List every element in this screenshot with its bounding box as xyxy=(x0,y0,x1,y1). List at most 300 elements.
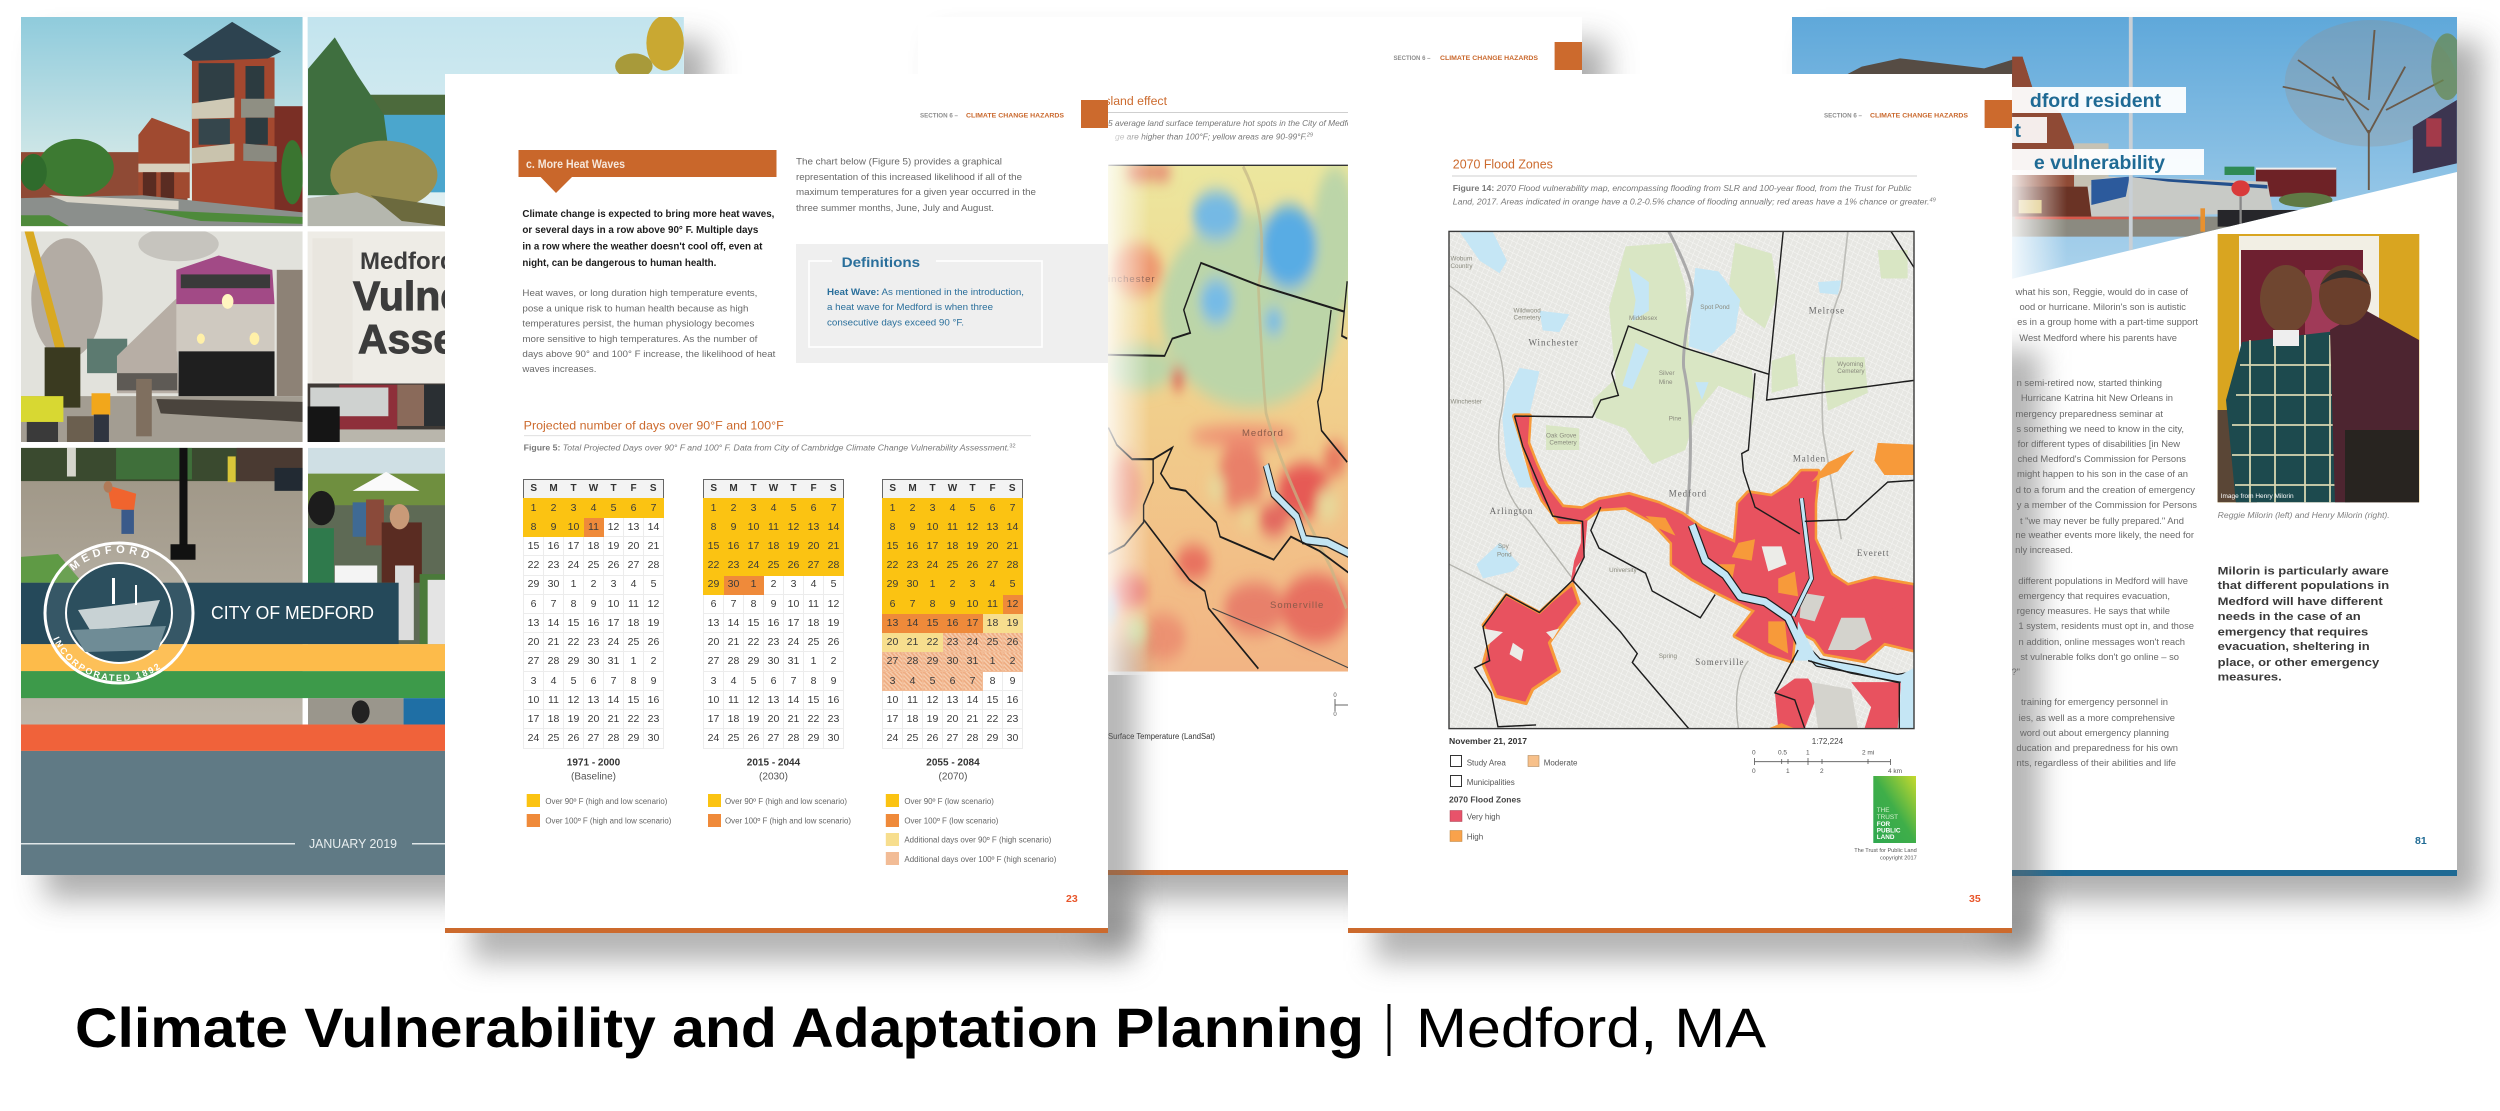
calendar: 2055-2084: 22 xyxy=(987,713,998,725)
calendar: 1971-2000 baseline: 13 xyxy=(588,694,599,706)
calendar: 1971-2000 baseline: 15 xyxy=(628,694,639,706)
calendar captions: 2055 - 2084 xyxy=(926,758,980,768)
calendar: 1971-2000 baseline: 31 xyxy=(608,655,619,667)
place names: Wyoming xyxy=(1837,361,1864,368)
body paragraph: more sensitive to high temperatures. As the number of xyxy=(522,333,758,344)
calendar: 2015-2044: 21 xyxy=(788,713,799,725)
text column: Milorin story: y a member of the Commission for Persons xyxy=(2017,499,2197,510)
photo: Medford storefront behind cover title xyxy=(308,231,446,442)
calendar legends: Over 90º F (low scenario) xyxy=(904,797,994,806)
calendar: 2055-2084: 14 xyxy=(907,617,918,629)
calendar: 2015-2044: 23 xyxy=(768,636,779,648)
calendar: 1971-2000 baseline: 19 xyxy=(568,713,579,725)
calendar: 2055-2084: 18 xyxy=(947,540,958,552)
page 35 cast shadow, right xyxy=(1992,350,2040,940)
calendar: 2055-2084: 25 xyxy=(907,732,918,744)
calendar: 2055-2084: 14 xyxy=(967,694,978,706)
calendar: 2015-2044: F xyxy=(810,483,817,494)
calendar: 2015-2044: 1 xyxy=(751,578,756,590)
calendar: 1971-2000 baseline: 23 xyxy=(548,559,559,571)
text column: Milorin story: ched Medford's Commission for Persons xyxy=(2017,453,2186,464)
calendar legends: Over 100º F (high and low scenario) xyxy=(545,816,672,826)
calendar: 1971-2000 baseline: 9 xyxy=(591,598,596,610)
cover photo collage xyxy=(20,16,691,876)
calendar: 2055-2084: 13 xyxy=(887,617,898,629)
calendar: 1971-2000 baseline: 12 xyxy=(608,521,619,533)
calendar: 2015-2044: W xyxy=(769,483,778,494)
running header: SECTION 6 – xyxy=(1394,55,1431,62)
cover title: Medford Vulnerability Assessment: Vulnerability xyxy=(353,273,598,319)
calendar: 1971-2000 baseline: 22 xyxy=(628,713,639,725)
map scale: 0 xyxy=(1333,693,1337,699)
bold intro paragraph: night, can be dangerous to human health. xyxy=(522,258,717,269)
calendar: 2015-2044: 5 xyxy=(791,502,796,514)
footer bar xyxy=(1348,928,2012,933)
calendar: 1971-2000 baseline: 24 xyxy=(608,636,619,648)
place names xyxy=(1451,256,1890,668)
photo caption: Reggie Milorin (left) and Henry Milorin (right). xyxy=(2218,511,2390,520)
heading: Medford resident fragments: t xyxy=(2014,120,2022,142)
calendar: 2015-2044: 25 xyxy=(808,636,819,648)
icon: city seal: INCORPORATED 1892 xyxy=(53,636,160,681)
calendar: 2015-2044: 11 xyxy=(768,521,779,533)
calendar: 1971-2000 baseline: 30 xyxy=(588,655,599,667)
calendar: 2055-2084: 25 xyxy=(947,559,958,571)
text column: Milorin story: ?" xyxy=(2011,666,2020,677)
text column: Milorin story: for different types of disabilities [in New xyxy=(2018,438,2180,449)
map legend: Municipalities xyxy=(1467,778,1515,787)
text column: Milorin story: nts, regardless of their abilities and life xyxy=(2017,757,2176,768)
footer bar xyxy=(445,928,1108,933)
callout: Milorin pull quote xyxy=(2218,566,2389,684)
calendar: 1971-2000 baseline: 8 xyxy=(571,598,576,610)
text column: Milorin story: might happen to his son in the case of an xyxy=(2017,468,2188,479)
calendar: 2015-2044: 14 xyxy=(828,521,839,533)
calendar: 2015-2044: 18 xyxy=(808,617,819,629)
calendar: 2055-2084: S xyxy=(889,483,896,494)
text column: Milorin story: nly increased. xyxy=(2015,544,2073,555)
calendar: 1971-2000 baseline: 27 xyxy=(588,732,599,744)
text column: Milorin story: what his son, Reggie, would do in case of xyxy=(2014,286,2188,297)
place names: Pond xyxy=(1497,551,1512,558)
calendar: 2015-2044: 31 xyxy=(788,655,799,667)
map scale: 0 xyxy=(1333,712,1337,718)
text column: Milorin story: Hurricane Katrina hit New Orleans in xyxy=(2021,392,2173,403)
map scale xyxy=(1333,693,1350,718)
calendar: 2055-2084 xyxy=(882,479,1023,749)
calendar: 2055-2084: 5 xyxy=(1010,578,1015,590)
calendar: 2015-2044: 6 xyxy=(811,502,816,514)
calendar: 2055-2084: 17 xyxy=(887,713,898,725)
calendar: 2055-2084: 16 xyxy=(947,617,958,629)
calendar: 2055-2084: 22 xyxy=(927,636,938,648)
calendar: 2015-2044: 27 xyxy=(768,732,779,744)
calendar: 2015-2044: 10 xyxy=(788,598,799,610)
calendar: 2015-2044: 11 xyxy=(808,598,819,610)
calendar: 2055-2084: 22 xyxy=(887,559,898,571)
calendar: 2055-2084: 24 xyxy=(887,732,898,744)
calendar: 2015-2044: S xyxy=(710,483,717,494)
calendar: 2055-2084: 29 xyxy=(987,732,998,744)
calendar: 2015-2044: 25 xyxy=(728,732,739,744)
flood zone: Mystic corridor xyxy=(1515,416,1914,661)
calendar: 2015-2044: 27 xyxy=(708,655,719,667)
calendar: 2055-2084: 4 xyxy=(910,675,915,687)
photo: commuter train and construction crew xyxy=(21,227,303,442)
calendar: 2055-2084: 2 xyxy=(910,502,915,514)
calendar: 2055-2084: 23 xyxy=(907,559,918,571)
calendar: 2015-2044: 23 xyxy=(728,559,739,571)
calendar captions: (Baseline) xyxy=(571,772,616,782)
calendar: 2055-2084: 21 xyxy=(1007,540,1018,552)
scale bar: 0 xyxy=(1752,768,1756,775)
calendar: 2055-2084: 8 xyxy=(990,675,995,687)
calendar: 2015-2044: 1 xyxy=(711,502,716,514)
calendar: 2015-2044: 4 xyxy=(811,578,816,590)
calendar: 2015-2044: 24 xyxy=(708,732,719,744)
calendar: 1971-2000 baseline: 21 xyxy=(648,540,659,552)
scale bar: 2 xyxy=(1820,768,1824,775)
calendar: 1971-2000 baseline: W xyxy=(589,483,598,494)
page 23 cast shadow, right xyxy=(1088,640,1136,940)
calendar: 2055-2084: 24 xyxy=(927,559,938,571)
calendar: 1971-2000 baseline: 11 xyxy=(548,694,559,706)
place names: Arlington xyxy=(1490,507,1533,517)
calendar: 2015-2044: 9 xyxy=(771,598,776,610)
calendar: 2055-2084: 31 xyxy=(967,655,978,667)
calendar: 1971-2000 baseline: 6 xyxy=(531,598,536,610)
calendar: 1971-2000 baseline: 21 xyxy=(548,636,559,648)
calendar: 2015-2044: 29 xyxy=(708,578,719,590)
calendar: 2055-2084: 26 xyxy=(1007,636,1018,648)
definitions box: Definitions xyxy=(842,255,920,270)
calendar: 1971-2000 baseline: 23 xyxy=(648,713,659,725)
place names: Country xyxy=(1451,263,1473,270)
text column: Milorin story: ood or hurricane. Milorin's son is autistic xyxy=(2020,301,2186,312)
calendar: 2055-2084: 16 xyxy=(907,540,918,552)
calendar: 1971-2000 baseline: 25 xyxy=(628,636,639,648)
place names: Woburn xyxy=(1451,256,1473,263)
calendar captions: 1971 - 2000 xyxy=(567,758,621,768)
calendar: 2055-2084: 1 xyxy=(930,578,935,590)
calendar: 2055-2084: 11 xyxy=(947,521,958,533)
calendar: 2055-2084: 6 xyxy=(950,675,955,687)
calendar: 1971-2000 baseline: 29 xyxy=(568,655,579,667)
scale bar: 4 km xyxy=(1888,768,1902,775)
calendar: 1971-2000 baseline: 14 xyxy=(548,617,559,629)
calendar: 2015-2044: 26 xyxy=(788,559,799,571)
calendar: 2015-2044: 30 xyxy=(768,655,779,667)
calendar: 2015-2044: 1 xyxy=(811,655,816,667)
calendar: 1971-2000 baseline: 18 xyxy=(628,617,639,629)
place names: Spot Pond xyxy=(1700,304,1730,311)
water xyxy=(1460,232,1841,579)
calendar: 2015-2044: 4 xyxy=(731,675,736,687)
text column: Milorin story: training for emergency personnel in xyxy=(2021,696,2168,707)
calendar: 1971-2000 baseline: 26 xyxy=(568,732,579,744)
calendar captions: (2070) xyxy=(939,772,967,782)
calendar: 2015-2044: 25 xyxy=(768,559,779,571)
calendar: 2055-2084: 13 xyxy=(987,521,998,533)
calendar: 1971-2000 baseline: 15 xyxy=(528,540,539,552)
bold intro paragraph: or several days in a row above 90° F. Multiple days xyxy=(522,225,759,236)
calendar: 2015-2044: 11 xyxy=(728,694,739,706)
calendar: 2055-2084: 28 xyxy=(1007,559,1018,571)
calendar: 2055-2084: 29 xyxy=(887,578,898,590)
text column: Milorin story: ne weather events more likely, the need for xyxy=(2015,529,2194,540)
calendar: 2055-2084: 23 xyxy=(1007,713,1018,725)
calendar: 2055-2084: F xyxy=(989,483,996,494)
calendar: 1971-2000 baseline: 16 xyxy=(648,694,659,706)
text column: Milorin story: ies, as well as a more comprehensive xyxy=(2019,712,2175,723)
place names: Cemetery xyxy=(1514,314,1541,322)
running header xyxy=(1824,100,2012,128)
calendar: 1971-2000 baseline: 4 xyxy=(551,675,556,687)
calendar: 2015-2044: 30 xyxy=(828,732,839,744)
place names: Somerville xyxy=(1695,658,1745,668)
figure caption: 32 xyxy=(1009,444,1016,450)
calendar: 2055-2084: 9 xyxy=(910,521,915,533)
heading: 2070 Flood Zones: 2070 Flood Zones xyxy=(1453,158,1553,172)
running header: CLIMATE CHANGE HAZARDS xyxy=(1440,55,1539,62)
body paragraph: Heat waves, or long duration high temperature events, xyxy=(522,287,757,298)
calendar: 2055-2084: 24 xyxy=(967,636,978,648)
definitions box xyxy=(796,244,1108,363)
place names: Medford xyxy=(1669,488,1707,500)
calendar: 1971-2000 baseline: M xyxy=(549,483,558,494)
calendar: 2055-2084: 18 xyxy=(987,617,998,629)
logo: The Trust for Public Land: PUBLIC xyxy=(1877,828,1901,834)
calendar: 2055-2084: 6 xyxy=(990,502,995,514)
calendar: 2055-2084: 20 xyxy=(947,713,958,725)
body paragraph: temperatures persist, the human physiology becomes xyxy=(522,318,755,328)
calendar: 1971-2000 baseline: 30 xyxy=(648,732,659,744)
figure caption xyxy=(1093,118,1359,142)
calendar: 2015-2044: 12 xyxy=(788,521,799,533)
calendar: 1971-2000 baseline: 16 xyxy=(548,540,559,552)
calendar: 2055-2084: 7 xyxy=(970,675,975,687)
panel: report cover xyxy=(21,17,684,875)
calendar: 2015-2044: 26 xyxy=(748,732,759,744)
calendar: 2055-2084: 18 xyxy=(907,713,918,725)
Mystic river xyxy=(1692,525,1918,679)
calendar: 2015-2044: 15 xyxy=(808,694,819,706)
cover colour bands xyxy=(21,583,691,876)
calendar: 2015-2044: 28 xyxy=(828,559,839,571)
calendar: 1971-2000 baseline: 19 xyxy=(608,540,619,552)
map legend: High xyxy=(1467,832,1483,842)
panel: page 23 heat waves xyxy=(445,74,1108,933)
calendar: 1971-2000 baseline: 24 xyxy=(528,732,539,744)
calendar: 2015-2044: 24 xyxy=(748,559,759,571)
heading: Medford resident fragments xyxy=(1990,87,2204,175)
callout: Milorin pull quote: place, or other emergency xyxy=(2218,657,2380,669)
place names: Malden xyxy=(1793,455,1826,465)
calendar: 2015-2044: T xyxy=(750,483,757,494)
place names: Mine xyxy=(1659,379,1673,386)
calendar: 1971-2000 baseline: 3 xyxy=(571,502,576,514)
logo: The Trust for Public Land: FOR xyxy=(1877,821,1891,828)
callout: Milorin pull quote: needs in the case of an xyxy=(2218,611,2361,623)
map legend: 2070 Flood Zones xyxy=(1449,796,1522,804)
place names: Melrose xyxy=(1809,306,1845,317)
calendar: 2055-2084: 19 xyxy=(927,713,938,725)
calendar: 2055-2084: S xyxy=(1009,483,1016,494)
calendar: 2015-2044: 23 xyxy=(828,713,839,725)
callout: Milorin pull quote: Milorin is particularly aware xyxy=(2218,566,2389,578)
calendar: 2055-2084: 30 xyxy=(947,655,958,667)
map place labels: Somerville xyxy=(1270,600,1324,611)
panel: urban heat island map page xyxy=(1108,23,1624,917)
logo: The Trust for Public Land: LAND xyxy=(1877,834,1895,841)
calendar: 2015-2044: 8 xyxy=(711,521,716,533)
boundaries xyxy=(1475,231,1914,729)
page number 35: 35 xyxy=(1969,893,1981,905)
scale bar: 0 xyxy=(1752,750,1756,756)
text column: Milorin story: word out about emergency planning xyxy=(2019,727,2169,738)
running header xyxy=(920,100,1108,128)
calendar: 2015-2044: 17 xyxy=(708,713,719,725)
logo: The Trust for Public Land: The Trust for Public Land xyxy=(1854,848,1917,854)
logo: The Trust for Public Land: TRUST xyxy=(1877,814,1898,821)
calendar: 1971-2000 baseline: 3 xyxy=(531,675,536,687)
calendar: 2015-2044: 16 xyxy=(828,694,839,706)
place names: Cemetery xyxy=(1549,439,1577,447)
calendar: 1971-2000 baseline: 5 xyxy=(611,502,616,514)
calendar: 2055-2084: 29 xyxy=(927,655,938,667)
calendar legends: Additional days over 100º F (high scenario) xyxy=(904,855,1057,864)
calendar: 2015-2044: 21 xyxy=(828,540,839,552)
calendar: 2055-2084: 23 xyxy=(947,636,958,648)
place names: Winchester xyxy=(1528,338,1579,348)
calendar: 2015-2044: 15 xyxy=(708,540,719,552)
calendar: 1971-2000 baseline: 2 xyxy=(551,502,556,514)
calendar: 2055-2084: 27 xyxy=(987,559,998,571)
calendar: 2015-2044: 9 xyxy=(831,675,836,687)
map legend: Study Area xyxy=(1467,758,1506,768)
calendar: 2015-2044 xyxy=(703,479,844,749)
calendar: 2015-2044: 20 xyxy=(768,713,779,725)
place names: Middlesex xyxy=(1629,315,1658,322)
calendar: 2015-2044: 14 xyxy=(728,617,739,629)
parks xyxy=(1546,243,1908,464)
calendar: 1971-2000 baseline: 18 xyxy=(588,540,599,552)
calendar: 2015-2044: 18 xyxy=(768,540,779,552)
calendar: 2055-2084: 2 xyxy=(950,578,955,590)
calendar captions xyxy=(567,758,980,782)
figure caption xyxy=(1453,183,1936,206)
photo: city hall clock tower xyxy=(20,17,304,226)
calendar: 2055-2084: 10 xyxy=(887,694,898,706)
calendar: 2055-2084: W xyxy=(948,483,957,494)
panel: page 81 resident profile xyxy=(1792,17,2457,876)
calendar: 2015-2044: 13 xyxy=(808,521,819,533)
calendar: 2015-2044: 6 xyxy=(771,675,776,687)
calendar: 2015-2044: 15 xyxy=(748,617,759,629)
calendar: 2015-2044: 20 xyxy=(708,636,719,648)
calendar: 2015-2044: 3 xyxy=(791,578,796,590)
map legend xyxy=(1449,756,1578,842)
calendar: 2055-2084: 17 xyxy=(927,540,938,552)
calendar: 1971-2000 baseline: 14 xyxy=(648,521,659,533)
calendar: 1971-2000 baseline: 4 xyxy=(591,502,596,514)
calendar: 1971-2000 baseline: 1 xyxy=(571,578,576,590)
calendar: 2055-2084: 12 xyxy=(1007,598,1018,610)
calendar: 1971-2000 baseline: 11 xyxy=(628,598,639,610)
callout: Milorin pull quote: emergency that requires xyxy=(2218,626,2368,638)
text column: Milorin story: st vulnerable folks don't go online – so xyxy=(2020,651,2179,662)
calendar: 2055-2084: 27 xyxy=(887,655,898,667)
footer bar xyxy=(918,870,1582,876)
calendar: 2015-2044: 10 xyxy=(708,694,719,706)
calendar: 2055-2084: 1 xyxy=(890,502,895,514)
calendar: 2055-2084: 11 xyxy=(987,598,998,610)
map date and ratio xyxy=(1449,736,1843,746)
running header: CLIMATE CHANGE HAZARDS xyxy=(1870,112,1968,120)
photo: Amtrak train at rail crossing xyxy=(1792,17,2457,278)
calendar: 2055-2084: 13 xyxy=(947,694,958,706)
calendar legends: Additional days over 90º F (high scenario) xyxy=(904,836,1052,844)
calendar legends: Over 90º F (high and low scenario) xyxy=(725,797,847,806)
calendar: 1971-2000 baseline: 2 xyxy=(651,655,656,667)
calendar: 1971-2000 baseline: 26 xyxy=(608,559,619,571)
calendar: 2015-2044: 28 xyxy=(728,655,739,667)
calendar: 2055-2084: T xyxy=(969,483,976,494)
calendar: 1971-2000 baseline: 14 xyxy=(608,694,619,706)
place names: Cemetery xyxy=(1837,368,1865,375)
calendar: 1971-2000 baseline: 22 xyxy=(568,636,579,648)
calendar: 1971-2000 baseline: 7 xyxy=(551,598,556,610)
running header: SECTION 6 – xyxy=(1824,112,1862,120)
calendar: 2015-2044: 5 xyxy=(831,578,836,590)
cover title: Medford Vulnerability Assessment: Assessment xyxy=(358,316,600,362)
calendar: 1971-2000 baseline: 10 xyxy=(528,694,539,706)
text column: Milorin story: 1 system, residents must opt in, and those xyxy=(2018,620,2194,631)
date line: January 2019: JANUARY 2019 xyxy=(309,836,397,851)
text column: Milorin story: n addition, online messages won't reach xyxy=(2019,636,2185,647)
calendar: 1971-2000 baseline: 22 xyxy=(528,559,539,571)
calendar legends: Over 100º F (low scenario) xyxy=(904,816,999,826)
calendar: 2015-2044: 16 xyxy=(768,617,779,629)
calendar: 2055-2084: 19 xyxy=(1007,617,1018,629)
calendar: 1971-2000 baseline: 15 xyxy=(568,617,579,629)
calendar: 1971-2000 baseline: 23 xyxy=(588,636,599,648)
text column: Milorin story: es in a group home with a part-time support xyxy=(2017,316,2198,327)
calendar: 1971-2000 baseline: 17 xyxy=(528,713,539,725)
callout: Milorin pull quote: evacuation, sheltering in xyxy=(2218,641,2370,653)
calendar: 2015-2044: M xyxy=(729,483,738,494)
calendar: 2015-2044: 7 xyxy=(731,598,736,610)
calendar: 1971-2000 baseline: 21 xyxy=(608,713,619,725)
city of medford label: CITY OF MEDFORD xyxy=(211,602,374,623)
calendar: 2055-2084: 25 xyxy=(987,636,998,648)
calendar: 2015-2044: 18 xyxy=(728,713,739,725)
calendar: 1971-2000 baseline: 20 xyxy=(588,713,599,725)
calendar: 1971-2000 baseline: 18 xyxy=(548,713,559,725)
chart heading: Projected number of days over 90°F and 100°F xyxy=(524,418,784,432)
calendar: 1971-2000 baseline: 30 xyxy=(548,578,559,590)
calendar: 2055-2084: M xyxy=(908,483,917,494)
place names: Spy xyxy=(1498,543,1509,550)
calendar: 1971-2000 baseline: 12 xyxy=(648,598,659,610)
calendar: 2055-2084: 12 xyxy=(927,694,938,706)
calendar: 2015-2044: 12 xyxy=(748,694,759,706)
calendar: 2055-2084: 9 xyxy=(1010,675,1015,687)
calendar: 2015-2044: S xyxy=(830,483,837,494)
panel: page 35 flood zones xyxy=(1348,74,2012,933)
heading: Medford resident fragments: dford resident xyxy=(2030,90,2162,112)
calendar: 2015-2044: 12 xyxy=(828,598,839,610)
